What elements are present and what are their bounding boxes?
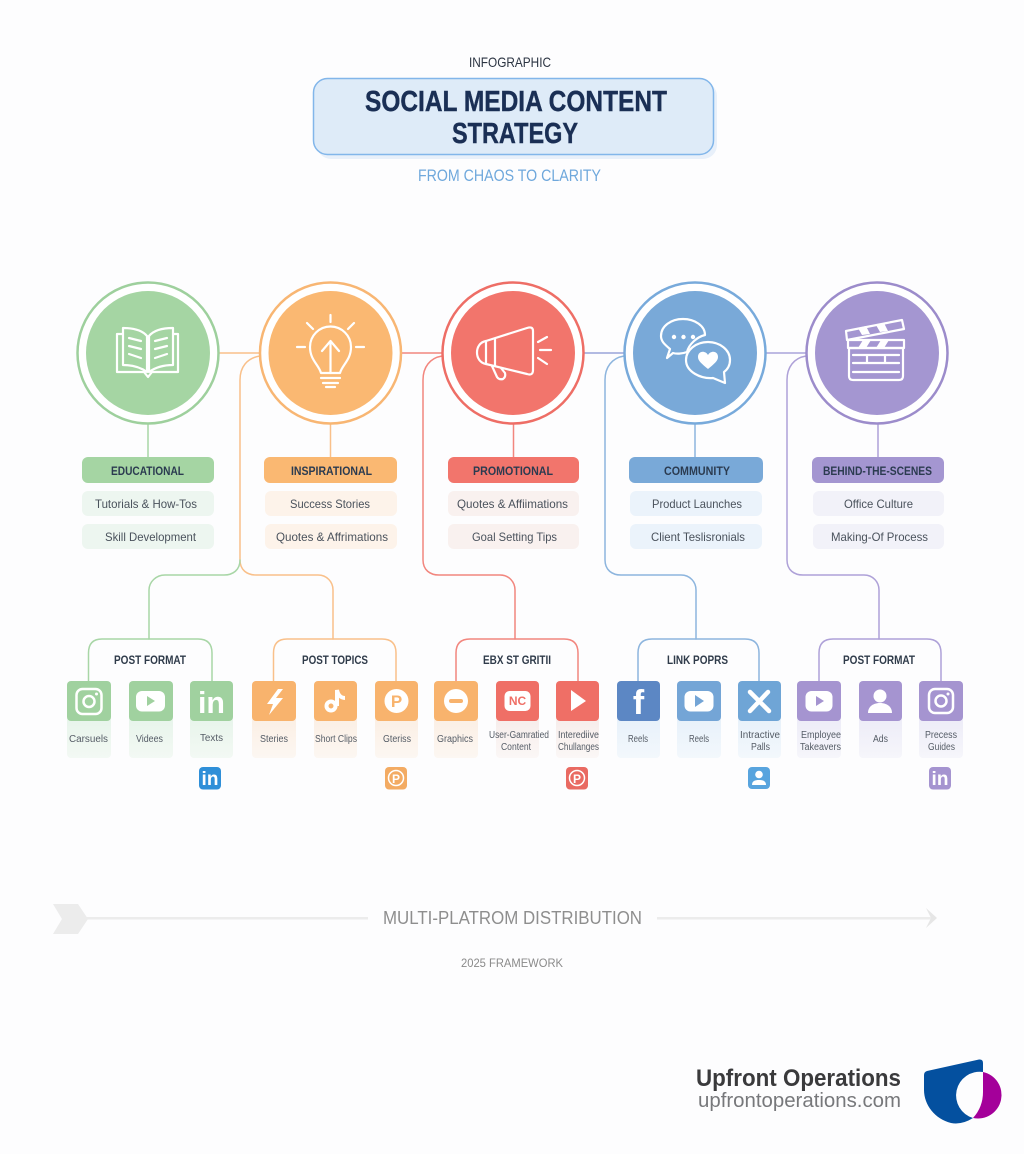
card: graphics: Graphics — [437, 734, 473, 745]
card: reels youtube: Reels — [689, 734, 709, 745]
framework year: 2025 FRAMEWORK — [461, 956, 563, 970]
promotional heading — [448, 457, 579, 483]
icon: linkedin: in — [198, 685, 225, 720]
card: employee takeovers: Employee — [801, 730, 841, 741]
column: community — [624, 282, 766, 549]
item: client testimonials — [630, 524, 762, 549]
badge: linkedin purple: in — [932, 769, 948, 790]
community circle with chat icon — [624, 282, 766, 424]
card: gteriss: Gteriss — [383, 734, 411, 745]
item: quotes: Quotes & Affiimations — [457, 497, 568, 511]
card: graphics — [434, 681, 478, 758]
item: product launches: Product Launches — [652, 497, 742, 511]
title box — [314, 78, 717, 159]
icon: instagram — [929, 689, 953, 713]
icon: tiktok — [326, 690, 345, 710]
item: success stories: Success Stories — [290, 497, 370, 511]
icon: instagram — [76, 689, 102, 714]
icon: play — [571, 690, 586, 711]
card: carousels — [67, 681, 111, 758]
title: SOCIAL MEDIA CONTENT — [365, 86, 667, 118]
icon: lightning — [267, 689, 283, 715]
educational heading — [82, 457, 214, 483]
card: short clips — [314, 681, 357, 758]
logo — [924, 1059, 1002, 1123]
item: quotes — [448, 491, 579, 516]
icon: x — [750, 692, 769, 711]
arrow: distribution — [53, 904, 937, 934]
icon: pinterest: P — [391, 692, 402, 711]
icon: youtube — [806, 691, 832, 712]
card: process guides: Precess — [925, 730, 957, 741]
card: interactive challenges — [556, 681, 599, 758]
column: educational — [78, 282, 218, 549]
card: stories: Steries — [260, 734, 288, 745]
card: carousels: Carsuels — [69, 734, 108, 745]
card: user-generated content — [489, 681, 549, 758]
card: videos: Videes — [136, 734, 163, 745]
item: success stories — [265, 491, 397, 516]
badge: person blue — [748, 767, 770, 789]
item: tutorials: Tutorials & How-Tos — [95, 497, 197, 511]
group label: post topics: POST TOPICS — [302, 653, 368, 667]
card: interactive challenges: Chullanges — [558, 742, 599, 753]
inspirational circle with bulb icon — [260, 282, 401, 424]
item: goal setting tips — [448, 524, 579, 549]
group label: post format: POST FORMAT — [114, 653, 187, 667]
icon: youtube — [684, 691, 714, 712]
title: STRATEGY — [452, 118, 578, 150]
educational heading: EDUCATIONAL — [111, 464, 184, 478]
item: office culture: Office Culture — [844, 497, 913, 511]
title — [365, 86, 667, 150]
inspirational heading: INSPIRATIONAL — [291, 464, 372, 478]
card: employee takeovers — [797, 681, 841, 758]
eyebrow label: INFOGRAPHIC — [469, 54, 551, 70]
card: interactive polls: Intractive — [740, 730, 780, 741]
card: process guides: Guides — [928, 742, 955, 753]
promotional circle with megaphone icon — [442, 282, 584, 424]
badge: linkedin blue: in — [202, 769, 218, 790]
community heading: COMMUNITY — [664, 464, 730, 478]
badge: pinterest red: P — [573, 772, 581, 786]
badge: pinterest orange: P — [392, 772, 400, 786]
item: making-of process — [813, 524, 944, 549]
card: reels facebook — [617, 681, 660, 758]
card: texts — [190, 681, 233, 758]
badge: pinterest orange — [385, 767, 407, 790]
card: ads — [859, 681, 902, 758]
icon: facebook: f — [633, 684, 645, 722]
item: office culture — [813, 491, 944, 516]
group label: promotional garbled: EBX ST GRITII — [483, 653, 551, 667]
item: goal setting tips: Goal Setting Tips — [472, 530, 557, 544]
card: process guides — [919, 681, 963, 758]
card: texts: Texts — [200, 733, 223, 744]
item: client testimonials: Client Teslisronials — [651, 530, 745, 544]
group label: link pops: LINK POPRS — [667, 653, 728, 667]
brand url: upfrontoperations.com — [698, 1090, 901, 1112]
item: skill development — [82, 524, 214, 549]
card: interactive challenges: Interediive — [558, 730, 599, 741]
behind-the-scenes heading: BEHIND-THE-SCENES — [823, 464, 932, 478]
icon: youtube — [136, 691, 165, 712]
badge: pinterest red — [566, 767, 588, 790]
card: short clips: Short Clips — [315, 734, 357, 745]
behind-the-scenes circle with clapper icon — [806, 282, 948, 424]
item: product launches — [630, 491, 762, 516]
item: quotes: Quotes & Affrimations — [276, 530, 388, 544]
icon: graphic circle — [444, 689, 468, 713]
community heading — [629, 457, 763, 483]
card: interactive polls — [738, 681, 781, 758]
card: employee takeovers: Takeavers — [800, 742, 841, 753]
card: gteriss — [375, 681, 418, 758]
card: videos — [129, 681, 173, 758]
connector lines — [88, 353, 941, 681]
item: quotes — [265, 524, 397, 549]
card: interactive polls: Palls — [751, 742, 770, 753]
header — [314, 54, 717, 185]
icon: person — [868, 690, 892, 713]
item: making-of process: Making-Of Process — [831, 530, 928, 544]
card: ads: Ads — [873, 734, 888, 745]
educational circle with book icon — [78, 282, 218, 424]
card: user-generated content: User-Gamratied — [489, 730, 549, 741]
behind-the-scenes heading — [812, 457, 944, 483]
item: tutorials — [82, 491, 214, 516]
column: inspirational — [260, 282, 401, 549]
subtitle: FROM CHAOS TO CLARITY — [418, 166, 601, 185]
inspirational heading — [264, 457, 397, 483]
card: reels youtube — [677, 681, 721, 758]
column: promotional — [442, 282, 584, 549]
promotional heading: PROMOTIONAL — [473, 464, 553, 478]
column: behind-the-scenes — [806, 282, 948, 549]
card: user-generated content: Content — [501, 742, 531, 753]
brand name: Upfront Operations — [696, 1065, 901, 1092]
group label: post format: POST FORMAT — [843, 653, 916, 667]
distribution label: MULTI-PLATROM DISTRIBUTION — [383, 908, 642, 928]
item: skill development: Skill Development — [105, 530, 197, 544]
icon: content badge: NC — [509, 694, 526, 708]
card: stories — [252, 681, 296, 758]
card: reels facebook: Reels — [628, 734, 648, 745]
